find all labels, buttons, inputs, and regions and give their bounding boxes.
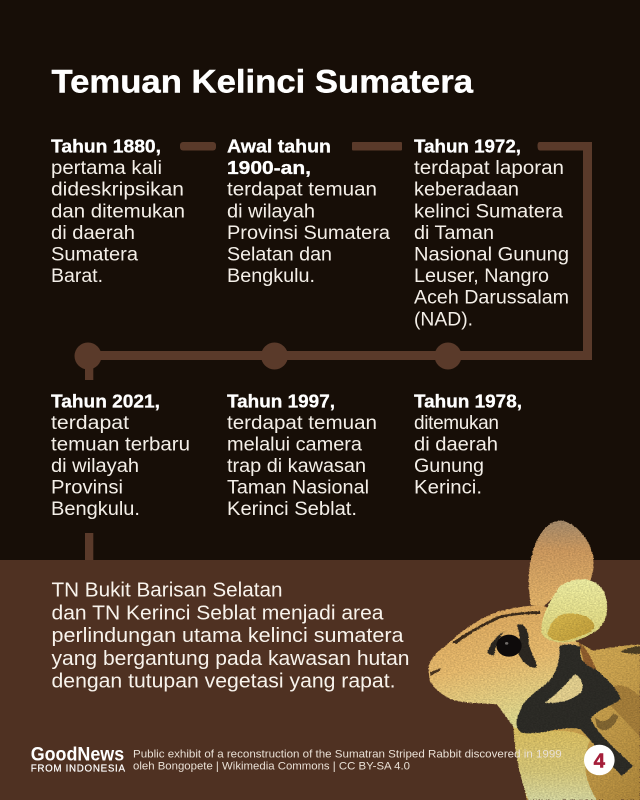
photo credit: Public exhibit of a reconstruction of the Sumatran Striped Rabbit discovered in 1999 xyxy=(133,749,562,761)
timeline entry: early 1900s: Bengkulu. xyxy=(227,266,315,287)
closing paragraph: dan TN Kerinci Seblat menjadi area xyxy=(52,602,384,624)
timeline entry: 1880: pertama kali xyxy=(51,158,162,179)
timeline entry: 1972: Tahun 1972, xyxy=(414,136,521,156)
timeline entry: early 1900s: terdapat temuan xyxy=(227,180,377,201)
timeline entry: 1972: Leuser, Nangro xyxy=(414,266,549,287)
rabbit eye xyxy=(496,635,522,657)
bottom panel xyxy=(0,560,640,800)
timeline entry: 1880: Barat. xyxy=(51,266,103,287)
timeline entry: 2021: Tahun 2021, xyxy=(51,391,160,412)
timeline entry: 2021: terdapat xyxy=(51,413,130,434)
timeline entry: 1997 xyxy=(227,391,377,520)
timeline entry: 1880: Tahun 1880, xyxy=(51,136,161,156)
timeline entry: 1978: Gunung xyxy=(414,456,484,477)
timeline entry: early 1900s: di wilayah xyxy=(227,201,315,222)
timeline entry: 1972: Aceh Darussalam xyxy=(414,288,569,309)
timeline entry: 1997: melalui camera xyxy=(227,435,362,456)
timeline entry: 1880 xyxy=(51,136,185,287)
timeline entry: 1972: keberadaan xyxy=(414,180,519,201)
timeline entry: 1972: Nasional Gunung xyxy=(414,244,569,266)
photo credit: oleh Bongopete | Wikimedia Commons | CC BY-SA 4.0 xyxy=(133,761,410,773)
timeline entry: 1997: Taman Nasional xyxy=(227,478,369,499)
timeline entry: 1978: di daerah xyxy=(414,435,498,456)
rabbit illustration xyxy=(428,521,640,800)
closing paragraph xyxy=(52,580,410,693)
timeline entry: 1972 xyxy=(414,136,569,330)
timeline entry: 1972: (NAD). xyxy=(414,309,473,330)
timeline entry: 1972: di Taman xyxy=(414,223,494,244)
timeline entry: 1997: terdapat temuan xyxy=(227,413,377,434)
title: Temuan Kelinci Sumatera xyxy=(52,63,474,99)
timeline entry: early 1900s: 1900-an, xyxy=(227,157,311,178)
timeline entry: 1978: Tahun 1978, xyxy=(414,391,522,412)
timeline entry: 2021: Bengkulu. xyxy=(51,499,140,520)
timeline entry: 2021: Provinsi xyxy=(51,478,123,499)
closing paragraph: TN Bukit Barisan Selatan xyxy=(52,580,282,602)
timeline entry: 1978 xyxy=(414,391,522,499)
timeline entry: 2021: temuan terbaru xyxy=(51,435,190,456)
timeline entry: 2021 xyxy=(51,391,190,520)
closing paragraph: dengan tutupan vegetasi yang rapat. xyxy=(52,671,396,693)
timeline entry: 1978: ditemukan xyxy=(414,413,499,434)
timeline entry: early 1900s: Awal tahun xyxy=(227,136,331,156)
timeline entry: 1997: trap di kawasan xyxy=(227,456,366,477)
logo: GoodNews xyxy=(31,745,124,766)
page number xyxy=(584,745,615,775)
timeline entry: 1972: terdapat laporan xyxy=(414,158,564,179)
timeline entry: 1972: kelinci Sumatera xyxy=(414,201,563,222)
logo: FROM INDONESIA xyxy=(31,764,125,775)
logo xyxy=(31,745,125,775)
timeline entry: 1978: Kerinci. xyxy=(414,478,482,499)
page number: 4 xyxy=(594,750,606,772)
timeline entry: 1880: di daerah xyxy=(51,223,135,244)
timeline entry: 1880: dan ditemukan xyxy=(51,201,185,222)
timeline entry: 2021: di wilayah xyxy=(51,456,139,477)
timeline connector xyxy=(74,142,592,560)
timeline entry: early 1900s xyxy=(227,136,390,287)
timeline entry: 1997: Tahun 1997, xyxy=(227,391,335,412)
timeline entry: 1880: Sumatera xyxy=(51,244,138,266)
closing paragraph: yang bergantung pada kawasan hutan xyxy=(52,648,410,670)
timeline entry: 1880: dideskripsikan xyxy=(51,180,184,201)
timeline entry: 1997: Kerinci Seblat. xyxy=(227,499,357,520)
closing paragraph: perlindungan utama kelinci sumatera xyxy=(52,625,404,647)
photo credit xyxy=(133,749,562,773)
timeline entry: early 1900s: Selatan dan xyxy=(227,244,332,266)
timeline entry: early 1900s: Provinsi Sumatera xyxy=(227,223,390,244)
